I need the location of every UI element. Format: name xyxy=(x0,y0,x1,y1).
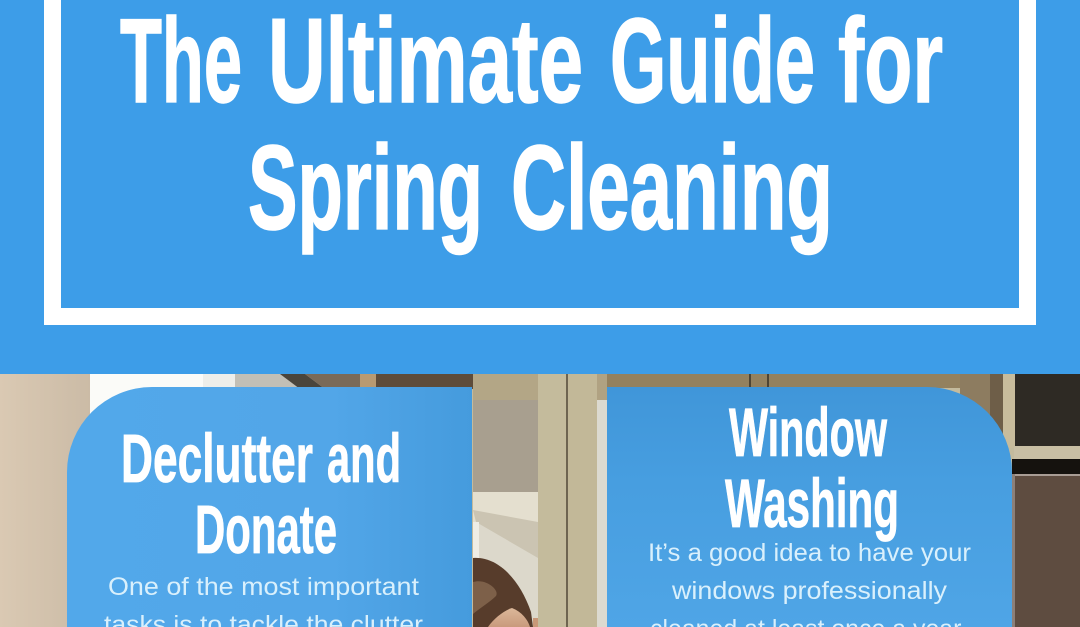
heading: Window xyxy=(729,394,887,471)
body text xyxy=(648,539,971,627)
panel background xyxy=(607,387,1012,627)
heading xyxy=(725,394,899,542)
panel background xyxy=(67,387,472,627)
heading: Donate xyxy=(195,491,337,568)
kitchen photo background xyxy=(0,374,1080,627)
blue header background xyxy=(0,0,1080,374)
title: Spring xyxy=(248,121,483,255)
panel: window washing xyxy=(607,387,1012,627)
body text: One of the most important xyxy=(108,573,419,601)
body text: It’s a good idea to have your xyxy=(648,539,971,567)
heading: and xyxy=(327,420,401,497)
panel: declutter and donate xyxy=(67,387,472,627)
heading: Washing xyxy=(725,465,899,542)
title frame xyxy=(44,0,1036,325)
body text xyxy=(104,573,423,627)
title: Cleaning xyxy=(511,121,833,255)
heading xyxy=(121,420,401,568)
title xyxy=(120,0,943,255)
heading: Declutter xyxy=(121,420,313,497)
person's head xyxy=(473,558,538,627)
body text: windows professionally xyxy=(671,577,948,605)
